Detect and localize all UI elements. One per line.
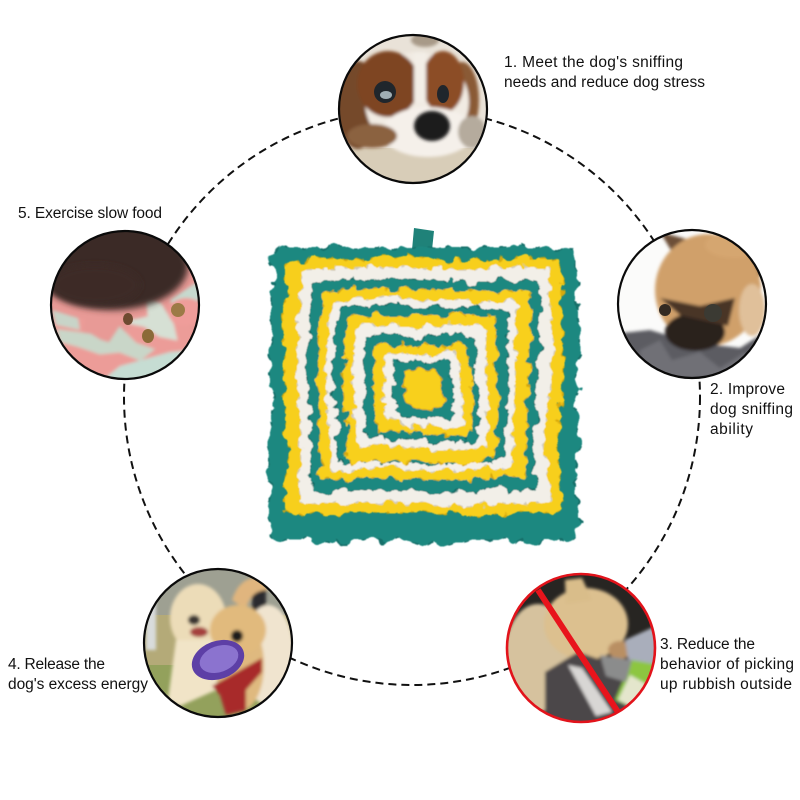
text: benefit 3: 3. Reduce the [660,636,755,653]
text: benefit 3: behavior of picking [660,656,794,673]
text: benefit 2: 2. Improve [710,381,785,398]
text: benefit 4: dog's excess energy [8,676,148,693]
photo 4: golden retrievers with purple frisbee [142,567,294,720]
dashed connecting ring [124,109,700,685]
text: benefit 1: needs and reduce dog stress [504,74,705,91]
text: benefit 4 [8,656,148,693]
photo 3: dog picking up rubbish, crossed out [504,572,660,725]
text: benefit 5: 5. Exercise slow food [18,205,162,222]
text: benefit 2: ability [710,421,753,438]
snuffle mat [270,228,578,542]
text: benefit 1 [504,54,705,91]
photo 5: dog nose in pink slow-feed mat [50,230,200,380]
text: benefit 4: 4. Release the [8,656,105,673]
concentric fabric rings [284,257,561,514]
text: benefit 1: 1. Meet the dog's sniffing [504,54,683,71]
text: benefit 3 [660,636,794,693]
mat hanging tab [412,228,434,250]
photo 2: french bulldog sniffing grey mat [615,228,771,384]
text: benefit 2 [710,381,793,438]
photo 1: spaniel resting on carpet [335,30,491,192]
outer teal ruffle [270,247,578,542]
text: benefit 3: up rubbish outside [660,676,792,693]
text: benefit 2: dog sniffing [710,401,793,418]
